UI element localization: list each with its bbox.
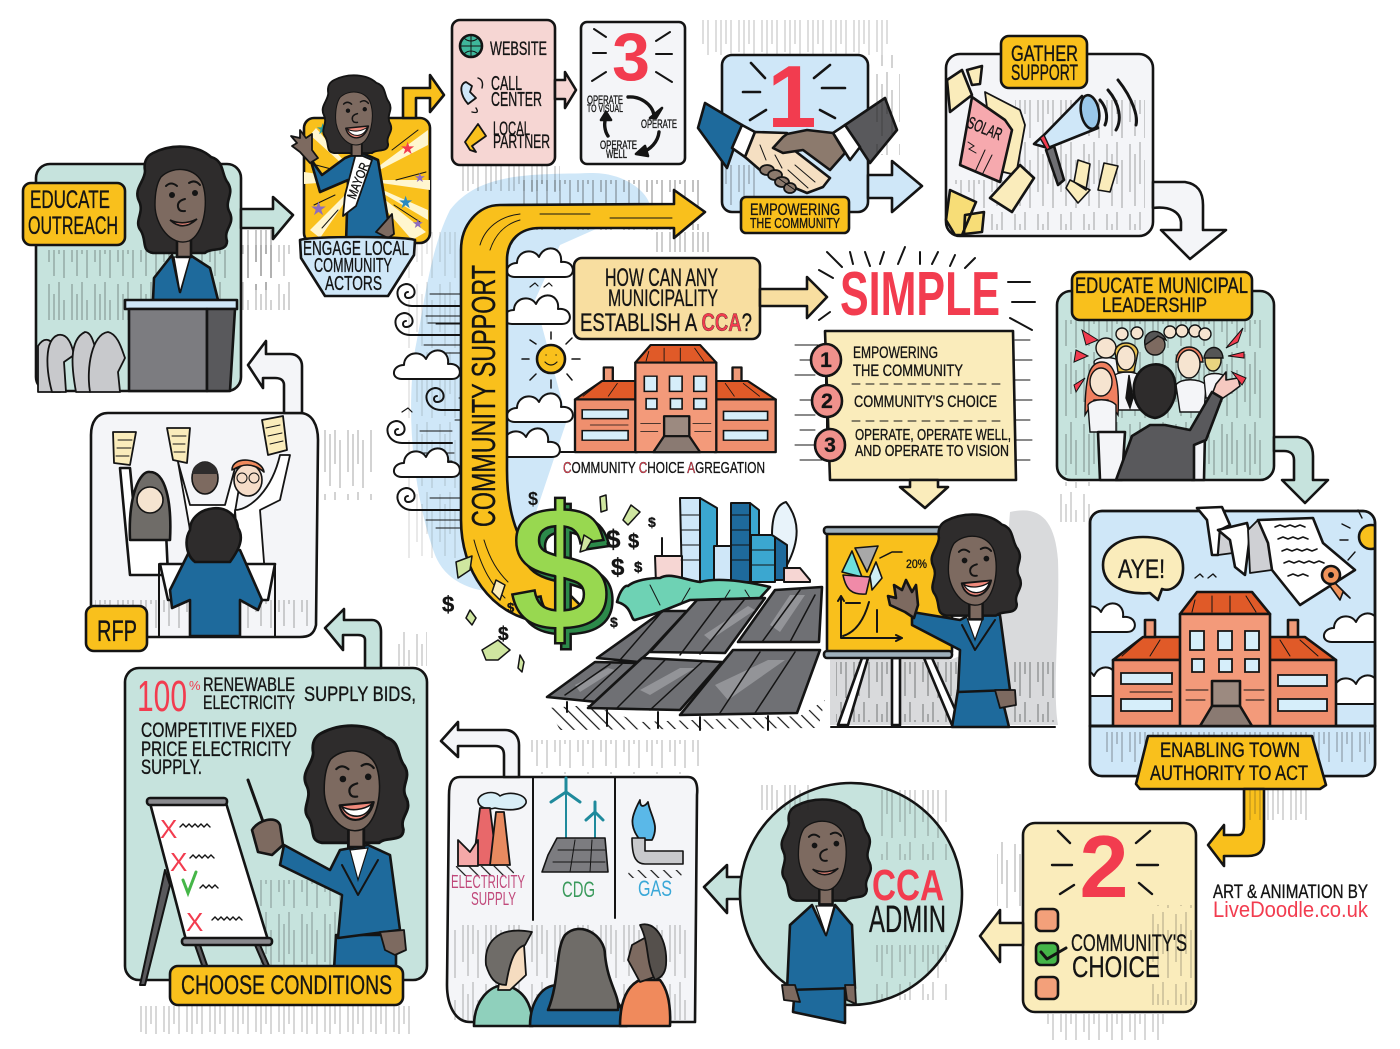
panel: simple steps list: COMMUNITY'S CHOICE [854,392,997,411]
panel: step 2: CHOICE [1072,951,1160,984]
illustration: town hall [1113,592,1336,726]
flip chart [140,798,272,985]
arrow: gather support to municipal leadership [1153,182,1226,259]
speech bubble: aye [1103,537,1183,600]
heading: simple: SIMPLE [840,260,1000,329]
heading: how can any municipality: ESTABLISH A CCA? [580,309,752,337]
arrow: supply to conditions [441,722,519,777]
illustration: dollar sign: $ [510,469,609,668]
illustration: falling money: $ [442,592,454,617]
illustration: falling money: $ [628,531,639,553]
panel: supply options: CDG [562,877,595,902]
icon: globe [460,35,482,57]
panel: cca admin: CCA [872,861,944,910]
illustration: falling money: $ [648,514,656,530]
label: gather support: GATHER [1011,41,1078,66]
illustration: city skyline [655,498,810,584]
panel: simple steps list: AND OPERATE TO VISION [855,443,1009,460]
panel: step 3 [581,19,685,164]
panel: step 3: TO VISUAL [587,103,623,115]
illustration: falling money: $ [634,559,643,576]
illustration: municipal building small [561,345,776,452]
credit: art and animation: LiveDoodle.co.uk [1213,897,1369,922]
mayor figure: MAYOR [344,160,372,201]
heading: how can any municipality: HOW CAN ANY [605,264,718,292]
heading: how can any municipality: MUNICIPALITY [608,285,718,312]
heading: simple [819,247,1035,330]
icon: gas flame and pipe [626,800,684,878]
illustration: falling money: $ [611,554,625,581]
panel: step 3: WELL [606,147,627,161]
arrow: rfp to outreach [248,341,302,413]
arrow: community support: COMMUNITY SUPPORT [465,265,502,527]
label: educate municipal leadership: EDUCATE MUNICIPAL [1075,273,1248,298]
label: enabling town authority: ENABLING TOWN [1160,739,1300,762]
handshake [698,98,897,193]
panel: step 3: OPERATE [587,93,623,107]
illustration: falling money: $ [507,600,515,615]
panel: choose conditions: PRICE ELECTRICITY [141,738,291,761]
decoration group: wind and clouds: $ [528,489,538,509]
panel: channels [452,20,555,165]
step number badges: 2 [821,390,833,413]
credit: art and animation [1213,882,1369,922]
label: rfp: RFP [97,615,137,648]
illustration: falling money [442,495,656,672]
label: choose conditions [170,966,403,1005]
panel: step 2: COMMUNITY'S [1071,930,1187,957]
panel: enabling town authority [1088,506,1376,778]
panel: supply options: SUPPLY [471,889,516,909]
choice checkboxes [1036,909,1066,999]
caption: community choice agregation: COMMUNITY CHOICE AGREGATION [563,460,765,477]
panel: educate municipal leadership [1057,291,1274,480]
arrow: question to simple [760,277,827,318]
panel: supply options: ELECTRICITY [451,872,525,892]
panel: simple steps list: OPERATE, OPERATE WELL, [855,427,1011,444]
panel: simple steps list [795,331,1032,480]
panel: educate outreach [36,147,241,392]
illustration: trees [617,576,770,620]
panel: step 1 [698,47,897,212]
arrow: leadership to town authority [1274,437,1328,503]
panel: simple steps list: THE COMMUNITY [853,361,963,380]
label: rfp [86,606,147,651]
panel: step 3: 3 [612,19,650,95]
panel: mayor: ★ [320,176,332,191]
panel: channels: LOCAL [493,119,530,140]
panel: mayor: ★ [398,193,413,212]
panel: choose conditions [125,668,427,985]
panel: choose conditions: 100 [137,672,187,721]
arrow: list to presenter [900,480,948,508]
panel: choose conditions: SUPPLY BIDS, [304,683,416,706]
arrow: mayor to channels [403,75,444,118]
label: educate municipal leadership [1072,272,1252,320]
label: enabling town authority [1136,736,1326,789]
mayor figure [291,75,394,243]
panel: mayor: ★ [310,199,327,220]
people watching [474,924,670,1026]
label: empowering the community: THE COMMUNITY [750,215,840,232]
panel: choose conditions: ELECTRICITY [203,693,295,714]
presenter figure [888,515,1021,727]
label: empowering the community [741,197,849,233]
illustration: scroll and seal [1197,507,1355,605]
illustration: falling money: $ [606,524,621,554]
illustration: falling money: $ [498,624,509,645]
label: educate municipal leadership: LEADERSHIP [1102,294,1207,317]
panel: mayor: ★ [316,121,329,138]
arrow: step 2 to cca admin [980,910,1023,962]
panel: rfp [91,413,318,637]
illustration: falling money: $ [610,614,618,630]
panel: channels: WEBSITE [490,39,547,60]
label: educate outreach [23,183,125,245]
flip chart: X [160,814,177,844]
label: educate outreach: EDUCATE [30,186,110,214]
icon: megaphone small [465,124,486,152]
presenter at podium [125,147,237,391]
presentation board: 20% [906,557,927,571]
panel: choose conditions: RENEWABLE [203,675,295,696]
panel: choose conditions: SUPPLY. [141,756,202,779]
panel: gather support [946,54,1153,236]
panel: simple steps list: EMPOWERING [853,343,938,362]
step number badges: 3 [824,434,836,457]
icon: factory [452,793,526,876]
arrow: town authority to step 2 [1208,789,1264,866]
icon: solar folder with papers: SOLAR [965,113,1005,144]
label: gather support: SUPPORT [1011,60,1078,85]
arrow: conditions to rfp [325,609,381,668]
decoration group: wind and clouds [387,248,573,528]
panel: channels: CALL [491,73,522,95]
panel: step 2: 2 [1080,817,1128,916]
label: engage local community actors: ENGAGE LOCAL [303,238,409,260]
panel: mayor: ★ [400,139,415,158]
label: engage local community actors: ACTORS [325,273,382,295]
label: engage local community actors [300,237,415,296]
panel: choose conditions: COMPETITIVE FIXED [141,719,297,742]
panel: mayor: ★ [412,216,424,231]
crowd [1085,325,1226,432]
panel: mayor: ★ [414,170,426,185]
icon: megaphone [1034,80,1136,203]
panel: step 3: OPERATE [641,117,677,131]
panel: channels: PARTNER [493,132,550,153]
panel: presenter at board [824,510,1058,727]
cycle arrows [601,97,662,156]
step number badges: 1 [820,349,832,372]
arrow: channels to step 3 [555,72,576,108]
label: enabling town authority: AUTHORITY TO ACT [1150,762,1308,785]
label: educate outreach: OUTREACH [28,212,118,240]
flip chart: X [170,847,187,877]
arrow: community support [456,190,705,622]
icon: wind turbines and solar [542,778,608,872]
panel: choose conditions: % [189,678,201,693]
applicant seen from behind [159,508,275,637]
speaker from behind [1098,364,1240,480]
step number badges [811,344,845,461]
illustration: solar panels [547,587,825,730]
label: choose conditions: CHOOSE CONDITIONS [181,970,392,1000]
panel: supply options: GAS [638,876,672,901]
panel: supply options [447,777,697,1026]
icon: phone [461,78,482,112]
panel: community cloud background [405,173,700,592]
panel: cca admin: ADMIN [869,899,946,941]
illustration: sun [522,332,580,388]
label: gather support [1001,36,1087,88]
admin figure [782,800,871,1023]
illustration: dollar sign: $ [516,475,615,674]
presenter with pointer [248,726,408,970]
arrow: step 1 to gather support [868,161,922,212]
panel: channels: CENTER [491,89,542,111]
presentation board [824,527,962,725]
flip chart: X [186,907,203,937]
panel: step 3: OPERATE [600,138,637,152]
label: engage local community actors: COMMUNITY [314,255,392,277]
audience silhouettes [38,332,125,392]
arrow: outreach to local actors [241,197,293,290]
panel: step 2 [1023,817,1196,1012]
speech bubble: aye: AYE! [1118,554,1165,584]
label: empowering the community: EMPOWERING [750,200,840,219]
icon: solar folder with papers [946,66,1034,235]
heading: how can any municipality [574,258,760,339]
panel: mayor [291,75,430,243]
panel: step 1: 1 [768,47,816,146]
bidders with documents [113,416,290,575]
panel: cca admin [704,783,962,1023]
